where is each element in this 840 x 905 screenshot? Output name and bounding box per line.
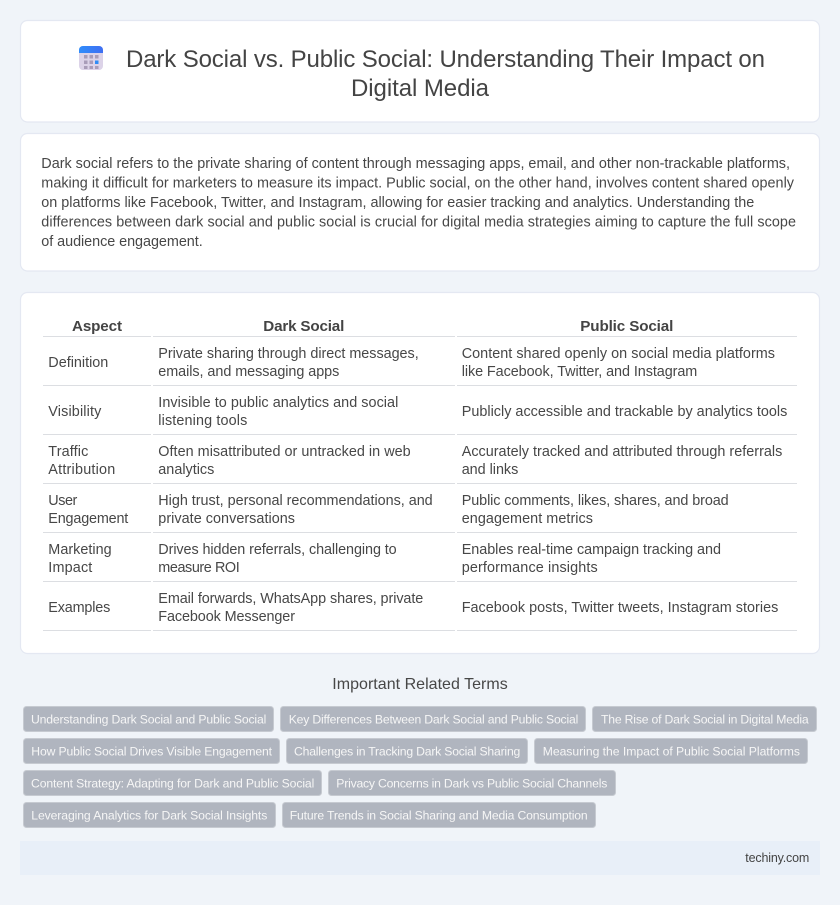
table row: Traffic Attribution: and links (462, 462, 518, 478)
table row: Examples: Facebook posts, Twitter tweets, Instagram stories (462, 600, 778, 616)
table row: User Engagement: Engagement (48, 511, 128, 527)
table row: Traffic Attribution: Often misattributed or untracked in web (158, 444, 411, 460)
table row: User Engagement: User (48, 493, 78, 509)
table header row: Aspect (72, 318, 122, 335)
text block: introduction paragraph: Dark social refers to the private sharing of content through messaging apps, email, and other non-trackable platforms, (41, 156, 790, 172)
table row: Examples: Facebook Messenger (158, 609, 295, 625)
table row: User Engagement (43, 493, 797, 532)
footer source text: techiny.com (745, 851, 809, 865)
table row: Marketing Impact (43, 542, 797, 582)
title: Dark Social vs. Public Social: Understanding Their Impact on (126, 46, 765, 73)
table row: Definition: like Facebook, Twitter, and Instagram (462, 364, 697, 380)
table row: Marketing Impact: measure ROI (158, 560, 240, 576)
icon: calendar (79, 46, 103, 70)
table row: Definition: emails, and messaging apps (158, 364, 339, 380)
table header row (43, 318, 797, 336)
chip row 2: How Public Social Drives Visible Engagement (31, 744, 273, 758)
table row: Marketing Impact: Impact (48, 560, 92, 576)
table row: Traffic Attribution: analytics (158, 462, 214, 478)
table row: Traffic Attribution: Accurately tracked and attributed through referrals (462, 444, 782, 460)
chip row 3: Privacy Concerns in Dark vs Public Social Channels (336, 776, 607, 790)
table row: Visibility (43, 395, 797, 434)
table row: Marketing Impact: Drives hidden referrals, challenging to (158, 542, 397, 558)
table row: Traffic Attribution: Attribution (48, 462, 115, 478)
text block: introduction paragraph (41, 156, 796, 250)
text block: introduction paragraph: differences between dark social and public social is crucial for digital media strategies aiming to capture the full scope (41, 214, 796, 230)
table row: Traffic Attribution: Traffic (48, 444, 88, 460)
chip row 4 (24, 802, 596, 828)
chip row 2: Measuring the Impact of Public Social Platforms (543, 744, 800, 758)
panel: introduction (20, 134, 820, 271)
chip row 1: Key Differences Between Dark Social and Public Social (289, 712, 578, 726)
chip row 3 (24, 770, 616, 796)
table header row: Dark Social (263, 318, 344, 335)
table row: Visibility: Publicly accessible and trackable by analytics tools (462, 404, 787, 420)
table row: Examples: Email forwards, WhatsApp shares, private (158, 591, 423, 607)
table header row: Public Social (580, 318, 673, 335)
table row: User Engagement: private conversations (158, 511, 295, 527)
title (126, 46, 765, 102)
table row: Marketing Impact: Marketing (48, 542, 112, 558)
table row: User Engagement: Public comments, likes, shares, and broad (462, 493, 729, 509)
table row: User Engagement: High trust, personal recommendations, and (158, 493, 433, 509)
chip row 2: Challenges in Tracking Dark Social Sharing (294, 744, 520, 758)
table row: Definition (43, 346, 797, 386)
table row: User Engagement: engagement metrics (462, 511, 593, 527)
table row: Marketing Impact: Enables real-time campaign tracking and (462, 542, 721, 558)
table row: Visibility: Visibility (48, 404, 102, 420)
table row: Definition: Content shared openly on social media platforms (462, 346, 775, 362)
text block: introduction paragraph: of audience engagement. (41, 234, 203, 250)
chip row 4: Leveraging Analytics for Dark Social Insights (31, 808, 267, 822)
heading: Important Related Terms: Important Related Terms (332, 676, 508, 693)
table row: Examples (43, 591, 797, 630)
table row: Definition: Private sharing through direct messages, (158, 346, 419, 362)
chip row 1: The Rise of Dark Social in Digital Media (601, 712, 809, 726)
table row: Definition: Definition (48, 355, 108, 371)
chip row 4: Future Trends in Social Sharing and Media Consumption (290, 808, 588, 822)
panel: title header (20, 20, 820, 122)
title: Digital Media (351, 75, 490, 102)
panel: comparison table (20, 292, 820, 654)
chip row 3: Content Strategy: Adapting for Dark and Public Social (31, 776, 314, 790)
chip row 1: Understanding Dark Social and Public Social (31, 712, 266, 726)
footer bar (20, 841, 820, 875)
table row: Marketing Impact: performance insights (462, 560, 598, 576)
table row: Traffic Attribution (43, 444, 797, 484)
text block: introduction paragraph: making it difficult for marketers to measure its impact. Public social, on the other hand, involves content shared openly (41, 176, 795, 192)
panel: related term chips (24, 706, 816, 828)
table row: Visibility: listening tools (158, 413, 247, 429)
table row: Visibility: Invisible to public analytics and social (158, 395, 398, 411)
table row: Examples: Examples (48, 600, 110, 616)
chip row 1 (24, 706, 816, 732)
text block: introduction paragraph: on platforms like Facebook, Twitter, and Instagram, allowing for easier tracking and analytics. Understanding the (41, 195, 754, 211)
chip row 2 (24, 738, 808, 764)
